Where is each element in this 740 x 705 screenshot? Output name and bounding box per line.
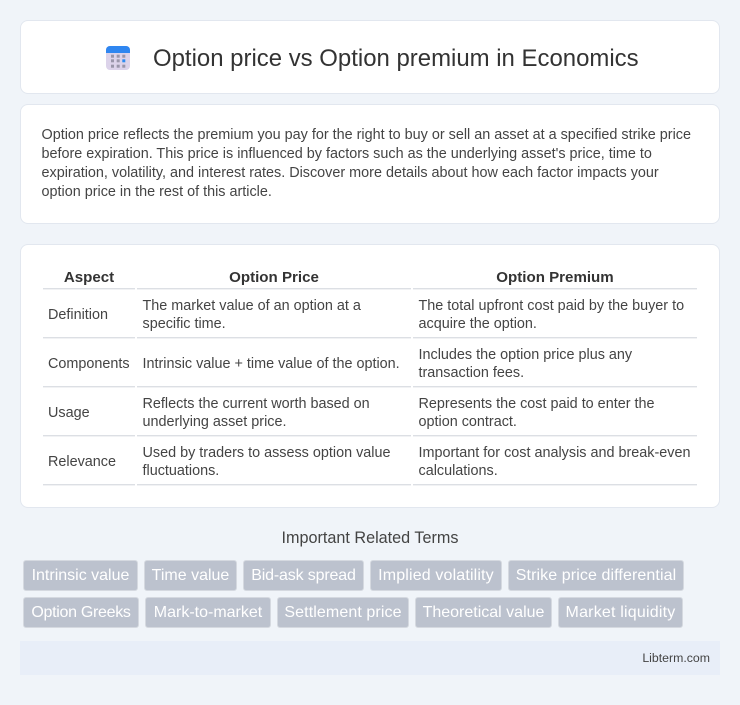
row: definition: Definition <box>48 307 108 323</box>
tags: Implied volatility <box>378 567 494 584</box>
row: relevance <box>48 445 690 479</box>
row: definition: specific time. <box>142 316 226 332</box>
column headers: Aspect <box>64 269 114 286</box>
row: usage <box>48 396 654 430</box>
row: relevance: Relevance <box>48 454 116 470</box>
row: components: Components <box>48 356 130 372</box>
header panel <box>20 20 720 94</box>
tags: Option Greeks <box>31 604 131 621</box>
row: usage: Reflects the current worth based on <box>142 396 370 412</box>
comparison table panel <box>20 244 720 508</box>
row: definition: The total upfront cost paid by the buyer to <box>418 298 684 314</box>
column headers <box>64 269 614 286</box>
row: relevance: fluctuations. <box>142 463 219 479</box>
column headers: Option Premium <box>496 269 614 286</box>
row: usage: underlying asset price. <box>142 414 286 430</box>
tags: Intrinsic value <box>32 567 129 584</box>
row: components <box>48 347 632 381</box>
row: usage: option contract. <box>418 414 517 430</box>
row: relevance: Important for cost analysis and break-even <box>418 445 690 461</box>
row: definition: acquire the option. <box>418 316 537 332</box>
tags: Theoretical value <box>423 604 544 621</box>
footer brand: Libterm.com <box>642 651 710 665</box>
related terms heading: Important Related Terms <box>282 529 458 547</box>
row: relevance: calculations. <box>418 463 498 479</box>
row: components: transaction fees. <box>418 365 524 381</box>
tags: Bid-ask spread <box>251 567 356 584</box>
row: components: Includes the option price plus any <box>418 347 632 363</box>
intro text: before expiration. This price is influenced by factors such as the underlying asset's price, time to <box>42 146 652 162</box>
row: relevance: Used by traders to assess option value <box>142 445 390 461</box>
row: definition: The market value of an option at a <box>142 298 361 314</box>
intro text <box>42 127 691 200</box>
footer bar <box>20 641 720 675</box>
column headers: Option Price <box>229 269 319 286</box>
row: definition <box>48 298 684 332</box>
tags <box>23 560 684 628</box>
row: components: Intrinsic value + time value of the option. <box>142 356 400 372</box>
row: usage: Usage <box>48 405 90 421</box>
title: Option price vs Option premium in Economics <box>153 45 639 72</box>
tags: Strike price differential <box>516 567 676 584</box>
icon: calendar <box>106 46 130 70</box>
tags: Market liquidity <box>566 604 675 621</box>
intro text: expiration, volatility, and interest rates. Discover more details about how each factor impacts your <box>42 165 659 181</box>
tags: Settlement price <box>284 604 402 621</box>
tags: Mark-to-market <box>154 604 262 621</box>
intro text: Option price reflects the premium you pay for the right to buy or sell an asset at a specified strike price <box>42 127 691 143</box>
intro text: option price in the rest of this article. <box>42 184 272 200</box>
intro panel <box>20 104 720 224</box>
row: usage: Represents the cost paid to enter the <box>418 396 654 412</box>
tags: Time value <box>152 567 229 584</box>
